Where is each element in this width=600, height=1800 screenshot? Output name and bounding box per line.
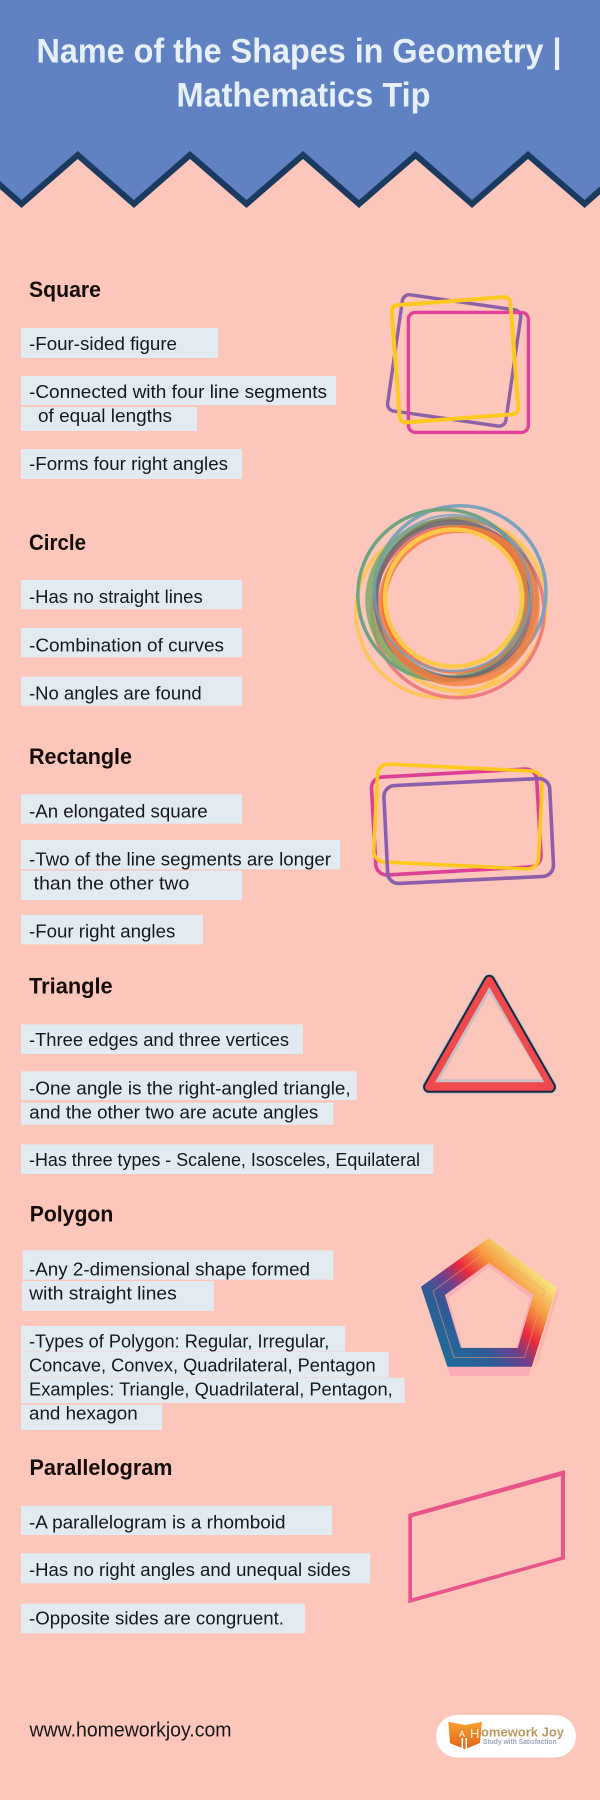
bullet: types and examples [21,1326,405,1430]
logo [436,1715,576,1758]
icon: triangle [429,980,550,1087]
panel: polygon [21,1202,559,1430]
icon: overlapping rectangles [371,764,554,884]
bullet: four-sided figure [21,328,218,358]
icon: pentagon [421,1238,559,1376]
bullet: no straight lines [21,580,242,609]
bullet: congruent sides [21,1604,305,1633]
bullet: longer line segments: -Two of the line segments are longer [29,848,331,869]
bullet: types and examples: -Types of Polygon: Regular, Irregular, [29,1330,329,1351]
panel: square [21,277,528,479]
panel: rectangle [21,744,554,944]
logo name: omework Joy [481,1725,565,1740]
panel: circle [21,506,546,706]
bullet: four right angles: -Four right angles [29,920,175,941]
icon: parallelogram [408,1470,565,1603]
bullet: right and acute angles: and the other two are acute angles [29,1101,318,1122]
icon: open book [448,1722,482,1749]
header banner [0,0,600,204]
bullet: rhomboid: -A parallelogram is a rhomboid [29,1511,286,1532]
bullet: elongated square: -An elongated square [29,800,208,821]
title: Name of the Shapes in Geometry | [36,32,562,70]
icon: open book: H [470,1726,479,1741]
bullet: two-dimensional shape: with straight lines [28,1282,177,1303]
bullet: three types: -Has three types - Scalene, Isosceles, Equilateral [29,1149,420,1170]
bullet: four-sided figure: -Four-sided figure [29,333,177,354]
bullet: rhomboid [21,1506,332,1535]
bullet: three types [21,1144,433,1174]
title: Mathematics Tip [176,76,430,114]
bullet: right and acute angles [21,1071,357,1125]
bullet: no right angles [21,1553,370,1583]
bullet: edges and vertices [21,1024,303,1054]
bullet: no straight lines: -Has no straight lines [29,586,203,607]
bullet: right and acute angles: -One angle is the right-angled triangle, [29,1077,351,1098]
panel: triangle [21,973,550,1174]
bullet: two-dimensional shape: -Any 2-dimensional shape formed [29,1258,310,1279]
bullet: right angles: -Forms four right angles [29,453,228,474]
title [36,32,562,114]
bullet: connected line segments: of equal lengths [38,405,172,426]
bullet: combination of curves: -Combination of curves [29,634,224,655]
bullet: types and examples: Examples: Triangle, Quadrilateral, Pentagon, [29,1379,393,1400]
bullet: two-dimensional shape [22,1250,333,1311]
heading: parallelogram: Parallelogram [30,1455,172,1480]
bullet: types and examples: Concave, Convex, Quadrilateral, Pentagon [29,1355,376,1376]
heading: square: Square [29,277,101,302]
bullet: types and examples: and hexagon [29,1402,138,1423]
bullet: connected line segments: -Connected with four line segments [29,381,327,402]
footer url: www.homeworkjoy.com [29,1720,231,1742]
heading: rectangle: Rectangle [29,744,132,769]
bullet: elongated square [21,794,242,824]
bullet: four right angles [21,915,203,944]
bullet: no angles: -No angles are found [29,682,202,703]
panel: parallelogram [21,1455,565,1633]
heading: triangle: Triangle [29,973,113,998]
bullet: right angles [21,449,242,479]
heading: circle: Circle [29,530,86,555]
icon: open book: A [459,1729,465,1739]
icon: overlapping circles [356,506,546,698]
bullet: congruent sides: -Opposite sides are congruent. [29,1607,284,1628]
bullet: edges and vertices: -Three edges and three vertices [29,1029,289,1050]
bullet: no angles [21,677,242,706]
bullet: combination of curves [21,628,242,657]
bullet: connected line segments [21,376,336,431]
bullet: no right angles: -Has no right angles and unequal sides [29,1559,350,1580]
bullet: longer line segments: than the other two [34,872,189,893]
logo pill [436,1715,576,1758]
icon: overlapping squares [387,294,528,432]
logo tagline: Study with Satisfaction [483,1739,557,1746]
bullet: longer line segments [21,840,340,900]
heading: polygon: Polygon [30,1202,113,1227]
